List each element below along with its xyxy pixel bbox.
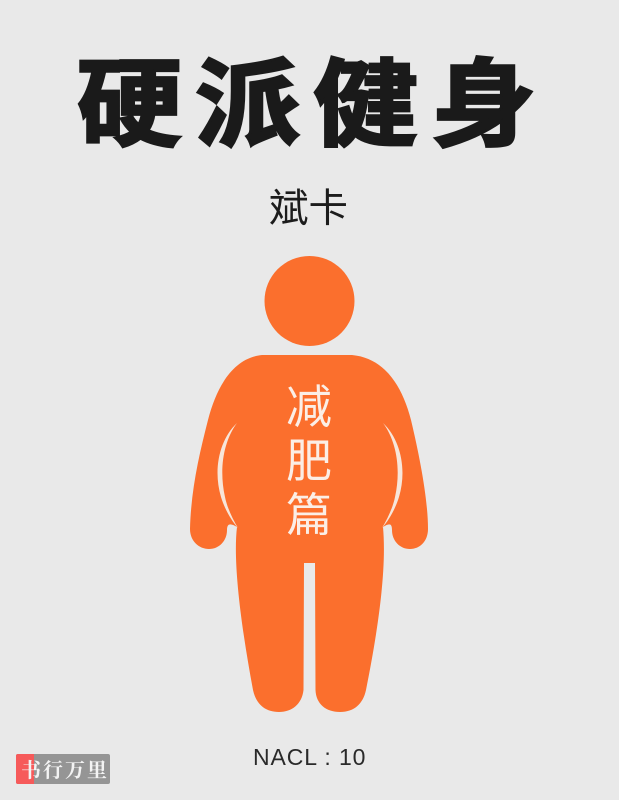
volume label: 减肥篇: 肥 bbox=[286, 425, 332, 491]
author: 斌卡 bbox=[269, 177, 348, 234]
icon: body bbox=[190, 355, 428, 712]
icon: right belly line bbox=[382, 423, 402, 528]
icon: head bbox=[264, 256, 354, 346]
volume label: 减肥篇: 篇 bbox=[286, 479, 332, 545]
badge text: 书行万里 bbox=[21, 754, 109, 783]
volume label: 减肥篇 bbox=[286, 371, 332, 545]
badge red block bbox=[16, 754, 34, 784]
icon: left belly line bbox=[218, 423, 238, 528]
volume number: NACL : 10 bbox=[253, 744, 366, 770]
volume label: 减肥篇: 减 bbox=[286, 371, 332, 437]
title: 硬派健身 bbox=[77, 28, 549, 166]
watermark badge bbox=[16, 754, 110, 784]
